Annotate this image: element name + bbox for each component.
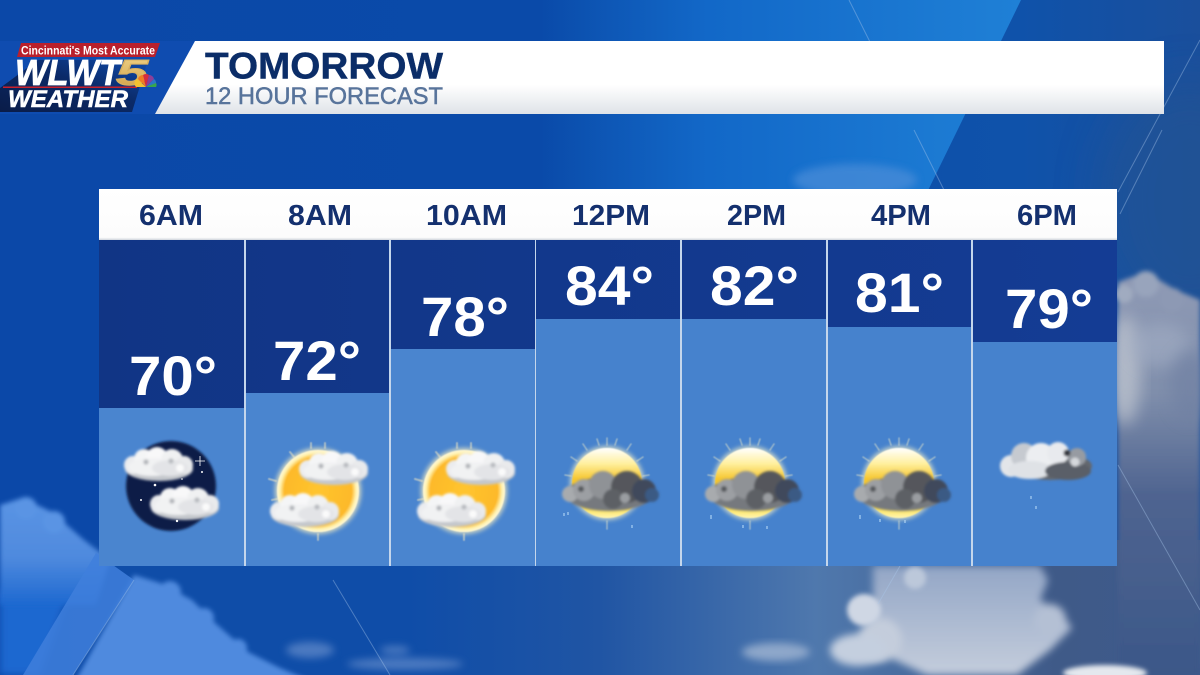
title panel xyxy=(155,41,1164,114)
label: 8AM: 8AM xyxy=(288,200,352,232)
icon: sun with storm cloud xyxy=(705,438,802,529)
lower left clouds xyxy=(0,497,463,675)
gold 5: 5 xyxy=(116,52,150,93)
label: 4PM: 4PM xyxy=(871,200,931,232)
icon: partly cloudy night xyxy=(124,441,219,531)
column: 4PM xyxy=(828,189,973,566)
temperature: 72: 72° xyxy=(273,329,361,392)
subtitle: 12 HOUR FORECAST xyxy=(205,83,443,110)
column: 12PM xyxy=(536,189,682,566)
icon: sun with storm cloud xyxy=(854,438,951,529)
header banner xyxy=(0,41,1164,114)
column: 10AM xyxy=(391,189,536,566)
lower centre clouds xyxy=(742,566,1147,675)
column: 8AM xyxy=(245,189,391,566)
temperature: 81: 81° xyxy=(855,261,944,324)
column: 6PM xyxy=(973,189,1117,566)
title: TOMORROW xyxy=(205,46,443,86)
peacock icon xyxy=(134,74,157,87)
label: 2PM: 2PM xyxy=(727,200,786,232)
right clouds xyxy=(1109,271,1200,675)
temperature: 84: 84° xyxy=(565,254,654,317)
label: 12PM: 12PM xyxy=(572,200,650,232)
table backing xyxy=(99,240,1117,566)
label: 6PM: 6PM xyxy=(1017,200,1077,232)
temperature: 79: 79° xyxy=(1005,277,1093,340)
label: 6AM: 6AM xyxy=(139,200,203,232)
icon: sun with storm cloud xyxy=(562,438,659,529)
icon: sun and clouds xyxy=(269,443,368,540)
WLWT wordmark: WLWT xyxy=(15,52,123,93)
temperature: 78: 78° xyxy=(421,285,509,348)
column: 6AM xyxy=(99,189,245,566)
forecast table xyxy=(99,189,1117,566)
column: 2PM xyxy=(682,189,828,566)
icon: rain cloud xyxy=(1000,442,1092,509)
logo block xyxy=(0,41,196,114)
temperature: 70: 70° xyxy=(129,344,217,407)
WEATHER wordmark: WEATHER xyxy=(8,86,129,113)
label: 10AM: 10AM xyxy=(426,200,507,232)
icon: sun and clouds xyxy=(415,443,515,540)
red tagline ribbon: Cincinnati's Most Accurate xyxy=(21,44,155,58)
temperature: 82: 82° xyxy=(710,254,799,317)
